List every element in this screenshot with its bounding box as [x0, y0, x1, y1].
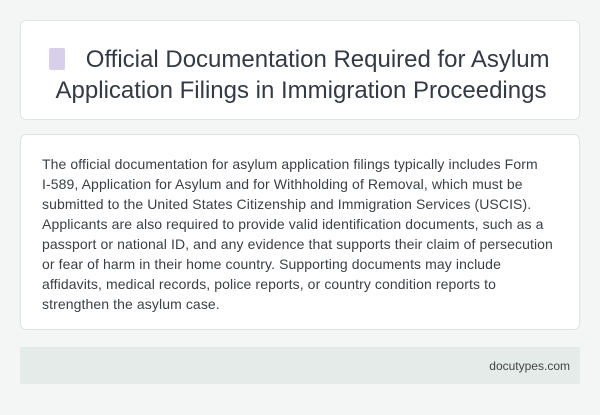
title — [56, 46, 550, 104]
icon: document — [49, 48, 65, 70]
footer — [20, 347, 580, 384]
title: Official Documentation Required for Asylum — [86, 46, 550, 73]
text block: The official documentation for asylum application filings typically includes Form I‑589, Application for Asylum and for Withholding of Removal, which must be submitted to the United States Citizenship and Immigration Services (USCIS). Applicants are also required to provide valid identification documents, such as a passport or national ID, and any evidence that supports their claim of persecution or fear of harm in their home country. Supporting documents may include affidavits, medical records, police reports, or country condition reports to strengthen the asylum case. — [42, 156, 553, 312]
title: Application Filings in Immigration Proceedings — [56, 77, 546, 104]
panel: title — [20, 20, 580, 120]
footer text: docutypes.com — [489, 359, 570, 373]
panel: description — [20, 134, 580, 330]
